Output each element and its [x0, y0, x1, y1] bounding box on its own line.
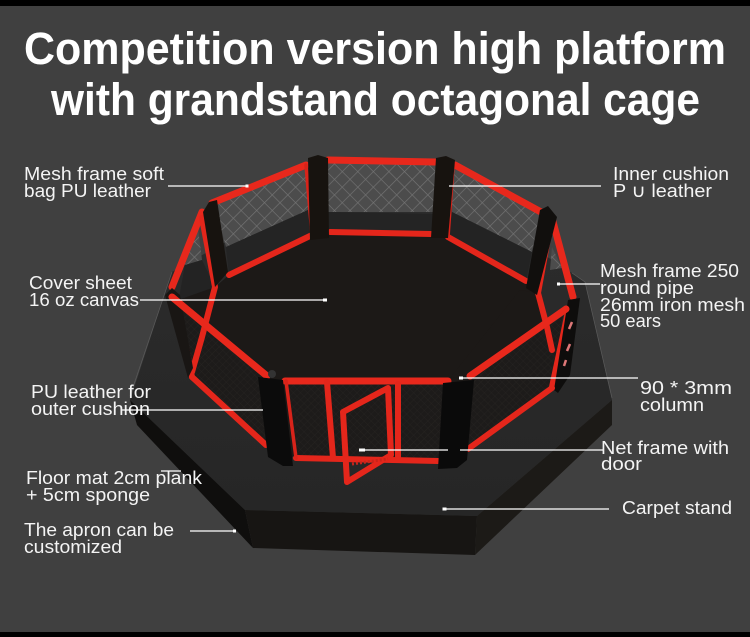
label: mesh frame round pipe — [557, 261, 745, 331]
back red rails — [328, 160, 435, 162]
label: mesh frame round pipe: Mesh frame 250 — [600, 261, 739, 281]
label: cover sheet: 16 oz canvas — [29, 290, 139, 310]
label: net frame with door: Net frame with — [601, 438, 729, 458]
label: PU leather outer cushion: outer cushion — [31, 399, 150, 419]
label: mesh frame soft bag: Mesh frame soft — [24, 164, 164, 184]
cage back mesh panels — [328, 160, 436, 212]
label: column: column — [640, 395, 704, 415]
title: with grandstand octagonal cage — [50, 74, 700, 125]
octagonal cage — [165, 155, 580, 482]
label: inner cushion: Inner cushion — [613, 164, 729, 184]
label: apron: customized — [24, 537, 122, 557]
label: mesh frame soft bag — [24, 164, 248, 201]
label: column — [459, 376, 732, 415]
label: apron — [24, 520, 236, 557]
label: floor mat: Floor mat 2cm plank — [26, 468, 203, 488]
label: mesh frame soft bag: bag PU leather — [24, 181, 151, 201]
label: carpet stand — [442, 498, 732, 518]
label: mesh frame round pipe: 50 ears — [600, 311, 661, 331]
title: Competition version high platform — [24, 23, 726, 74]
label: inner cushion — [449, 164, 729, 201]
label: mesh frame round pipe: 26mm iron mesh — [600, 295, 745, 315]
cage back skirt — [328, 212, 436, 234]
post padding stripes — [564, 322, 572, 366]
canvas floor — [178, 232, 552, 460]
label: apron: The apron can be — [24, 520, 174, 540]
floor lower-right patch — [450, 290, 547, 378]
label: cover sheet: Cover sheet — [29, 273, 132, 293]
label: net frame with door — [359, 438, 729, 474]
label: inner cushion: P ∪ leather — [613, 181, 712, 201]
label: cover sheet — [29, 273, 327, 310]
door — [343, 388, 391, 482]
title — [24, 23, 726, 125]
label: floor mat: + 5cm sponge — [26, 485, 150, 505]
label: PU leather outer cushion — [31, 382, 263, 419]
front rails — [172, 297, 267, 376]
front corner posts — [258, 377, 293, 466]
label: mesh frame round pipe: round pipe — [600, 278, 694, 298]
label: floor mat — [26, 468, 203, 505]
label: PU leather outer cushion: PU leather for — [31, 382, 151, 402]
label: net frame with door: door — [601, 454, 642, 474]
left side rails — [172, 212, 202, 287]
platform front face — [245, 510, 477, 555]
back and side corner posts — [308, 155, 329, 240]
platform left side face — [130, 400, 253, 548]
platform right side face — [475, 400, 612, 555]
front mesh panels — [177, 300, 267, 445]
platform top surface — [130, 200, 612, 516]
right side rails — [552, 218, 573, 297]
platform: octagonal stage — [130, 200, 612, 555]
label: carpet stand: Carpet stand — [622, 498, 732, 518]
label: column: 90 * 3mm — [640, 378, 732, 398]
